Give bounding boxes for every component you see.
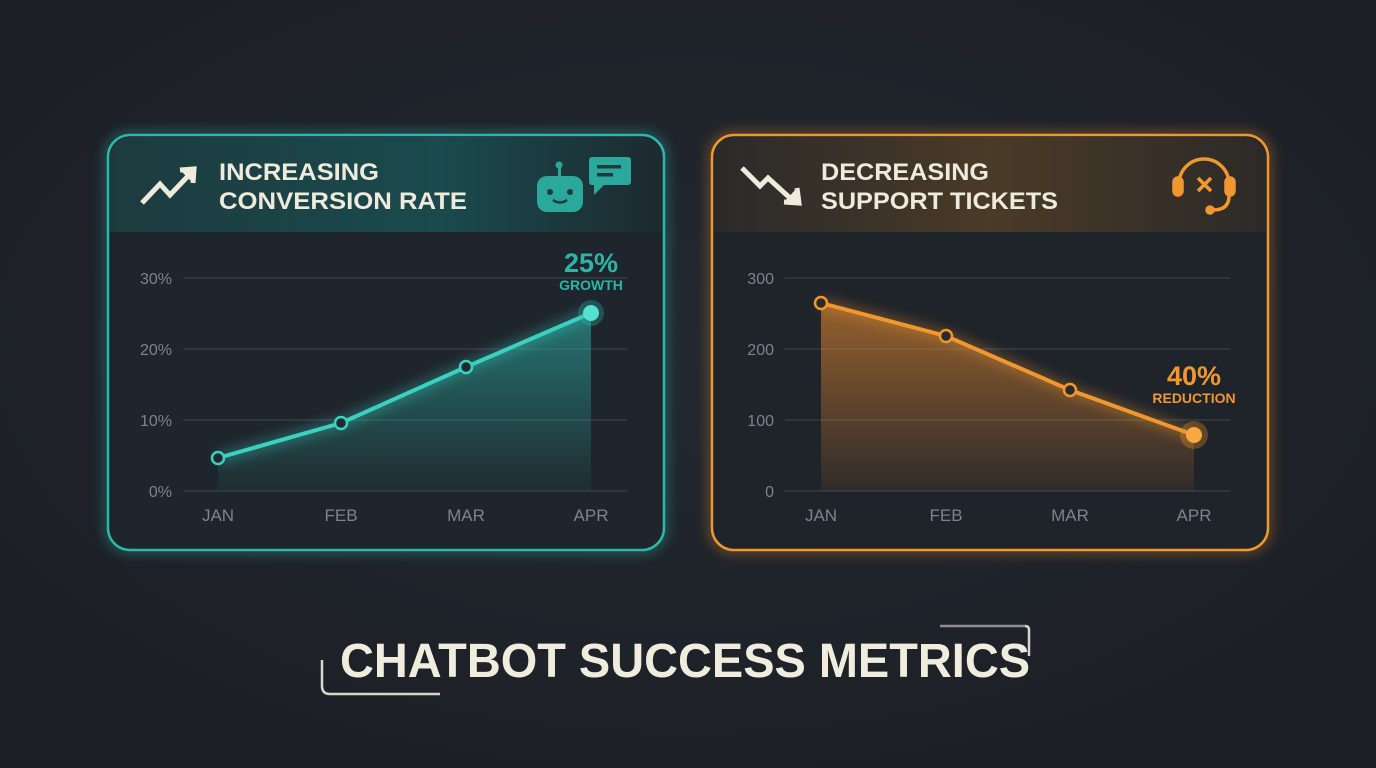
chart: tickets line chart: 300 [747,271,774,288]
chart: conversion line chart: 0% [149,484,172,501]
chart: conversion line chart: 20% [140,342,172,359]
callout: 25% growth: 25% [564,248,618,278]
callout: 40% reduction: REDUCTION [1152,390,1236,406]
callout: 25% growth: GROWTH [559,277,623,293]
heading: decreasing support tickets [821,159,1058,215]
chart: conversion line chart: APR [574,506,608,525]
heading: increasing conversion rate: INCREASING [219,159,379,186]
heading: decreasing support tickets: SUPPORT TICKETS [821,188,1058,215]
chart: tickets line chart: APR [1177,506,1211,525]
heading: increasing conversion rate: CONVERSION RATE [219,188,467,215]
chart: conversion line chart: 10% [140,413,172,430]
icon: headset with x [1174,159,1234,213]
chart: tickets line chart: MAR [1051,506,1089,525]
panel: conversion rate [108,135,664,550]
title: chatbot success metrics: CHATBOT SUCCESS METRICS [340,635,1030,688]
panel: support tickets [712,135,1268,550]
chart: tickets line chart: FEB [929,506,963,525]
chart: tickets line chart: 0 [765,484,774,501]
callout: 40% reduction: 40% [1167,361,1221,391]
callout: 25% growth [559,248,623,293]
chart: tickets line chart [747,271,1230,525]
chart: conversion line chart: FEB [324,506,358,525]
icon: trend up arrow [142,169,194,203]
heading: increasing conversion rate [219,159,467,215]
chart: conversion line chart [140,271,627,525]
callout: 40% reduction [1152,361,1236,406]
chart: conversion line chart: 30% [140,271,172,288]
chart: conversion line chart: MAR [447,506,485,525]
icon: trend down arrow [742,168,799,203]
icon: robot with chat [537,157,631,212]
heading: decreasing support tickets: DECREASING [821,159,989,186]
chart: tickets line chart: 100 [747,413,774,430]
chart: tickets line chart: JAN [805,506,837,525]
chart: tickets line chart: 200 [747,342,774,359]
chart: conversion line chart: JAN [202,506,234,525]
